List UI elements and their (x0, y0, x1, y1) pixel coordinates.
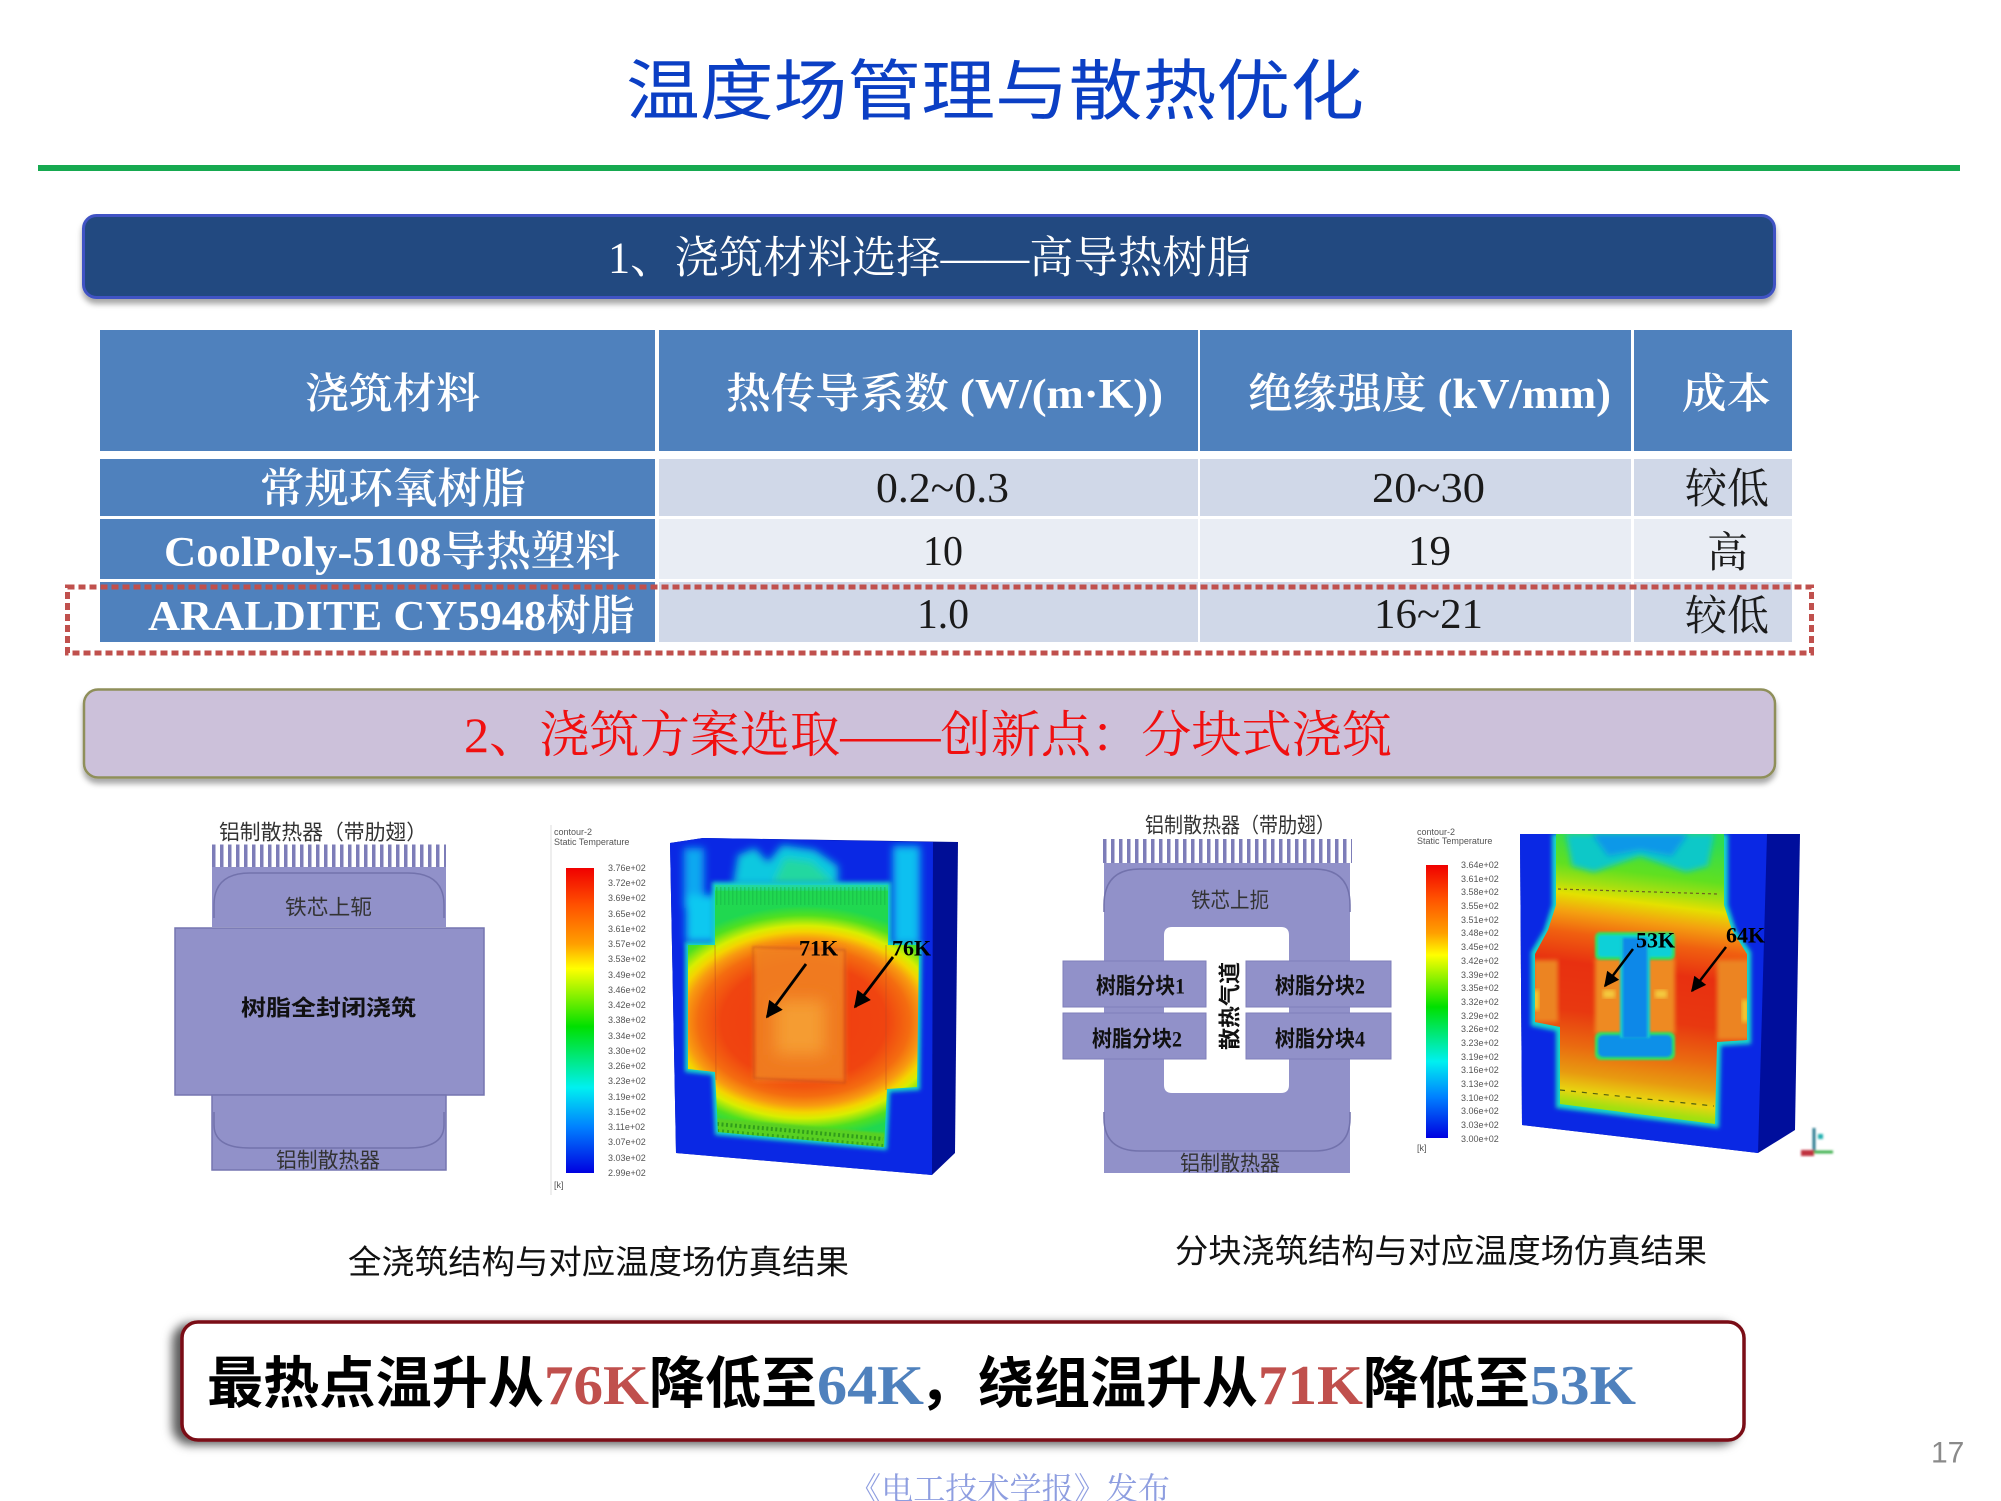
heat map: segmented potting (1520, 834, 1833, 1156)
diagram: segmented potting structure: 树脂分块4 (1275, 1026, 1365, 1052)
legend: left colour bar: 3.34e+02 (608, 1031, 646, 1041)
label: 53K: 53K (1636, 928, 1675, 952)
table header row (100, 330, 1792, 451)
arrow: 71K (767, 964, 806, 1017)
banner: section 2 (84, 690, 1775, 778)
legend: right colour bar: 3.61e+02 (1461, 874, 1499, 884)
page number: 17 (1931, 1436, 1964, 1470)
legend: left colour bar: Static Temperature (554, 837, 629, 847)
table row: epoxy: 0.2~0.3 (876, 466, 1009, 512)
heat map: full potting (670, 838, 958, 1175)
legend: right colour bar: 3.45e+02 (1461, 942, 1499, 952)
diagram: segmented potting structure: 铝制散热器（带肋翅） (1145, 814, 1335, 838)
legend: right colour bar: 3.13e+02 (1461, 1079, 1499, 1089)
table row: Araldite: ARALDITE CY5948树脂 (148, 593, 635, 640)
diagram: full potting structure: 铝制散热器（带肋翅） (219, 822, 427, 844)
diagram: segmented potting structure: 铝制散热器 (1180, 1152, 1280, 1176)
legend: left colour bar: 3.53e+02 (608, 954, 646, 964)
legend: left colour bar: contour-2 (554, 827, 592, 837)
legend: left colour bar: 3.26e+02 (608, 1061, 646, 1071)
highlight: dashed box (68, 587, 1812, 653)
diagram: segmented potting structure: 树脂分块1 (1096, 974, 1185, 998)
diagram: segmented potting structure (1063, 814, 1391, 1176)
legend: left colour bar: 3.23e+02 (608, 1076, 646, 1086)
diagram: segmented potting structure: 树脂分块2 (1092, 1026, 1182, 1052)
table header row: 成本 (1682, 372, 1771, 418)
legend: right colour bar: 3.19e+02 (1461, 1052, 1499, 1062)
legend: right colour bar: 3.26e+02 (1461, 1024, 1499, 1034)
legend: left colour bar: 3.15e+02 (608, 1107, 646, 1117)
legend: left colour bar: 3.49e+02 (608, 970, 646, 980)
legend: right colour bar: 3.58e+02 (1461, 887, 1499, 897)
table header row: 浇筑材料 (305, 371, 480, 418)
legend: right colour bar: 3.16e+02 (1461, 1065, 1499, 1075)
legend: right colour bar: 3.06e+02 (1461, 1106, 1499, 1116)
title underline (38, 165, 1960, 171)
caption: full potting: 全浇筑结构与对应温度场仿真结果 (348, 1244, 849, 1280)
legend: right colour bar: contour-2 (1417, 827, 1455, 837)
legend: left colour bar: 3.46e+02 (608, 985, 646, 995)
legend: right colour bar: 3.23e+02 (1461, 1038, 1499, 1048)
legend: left colour bar: 2.99e+02 (608, 1168, 646, 1178)
legend: right colour bar: 3.10e+02 (1461, 1093, 1499, 1103)
legend: right colour bar (1417, 827, 1499, 1153)
arrow: 64K (1692, 947, 1726, 991)
table row: Araldite: 16~21 (1374, 592, 1483, 638)
legend: left colour bar (551, 825, 646, 1195)
legend: right colour bar: Static Temperature (1417, 836, 1492, 846)
conclusion box: 绕组温升从 (978, 1354, 1258, 1416)
conclusion box: 降低至 (1363, 1354, 1530, 1416)
legend: right colour bar: 3.48e+02 (1461, 928, 1499, 938)
legend: left colour bar: 3.38e+02 (608, 1015, 646, 1025)
legend: right colour bar: 3.51e+02 (1461, 915, 1499, 925)
legend: left colour bar: 3.72e+02 (608, 878, 646, 888)
legend: right colour bar: 3.35e+02 (1461, 983, 1499, 993)
table: casting materials (100, 330, 1792, 642)
table header row: 绝缘强度 (kV/mm) (1248, 371, 1611, 418)
legend: left colour bar: 3.65e+02 (608, 909, 646, 919)
banner: section 1 (84, 216, 1774, 298)
diagram: full potting structure (175, 822, 484, 1172)
legend: left colour bar: 3.11e+02 (608, 1122, 645, 1132)
legend: right colour bar: 3.32e+02 (1461, 997, 1499, 1007)
banner: section 1: 1、浇筑材料选择——高导热树脂 (608, 234, 1251, 282)
conclusion box: 76K (544, 1355, 649, 1417)
legend: left colour bar: 3.76e+02 (608, 863, 646, 873)
conclusion box: 最热点温升从 (207, 1354, 544, 1416)
table row: CoolPoly: CoolPoly-5108导热塑料 (164, 529, 620, 576)
label: 64K: 64K (1726, 922, 1765, 948)
arrow: 53K (1605, 949, 1633, 986)
legend: right colour bar: 3.00e+02 (1461, 1134, 1499, 1144)
table header row: 热传导系数 (W/(m·K)) (726, 371, 1163, 418)
table row: CoolPoly: 19 (1408, 529, 1451, 575)
label: 76K: 76K (892, 936, 931, 960)
legend: right colour bar: 3.64e+02 (1461, 860, 1499, 870)
conclusion box: 64K (817, 1355, 924, 1417)
legend: left colour bar: 3.61e+02 (608, 924, 646, 934)
legend: right colour bar: 3.42e+02 (1461, 956, 1499, 966)
diagram: segmented potting structure: 树脂分块2 (1275, 974, 1365, 998)
table row: Araldite: 较低 (1685, 594, 1769, 640)
legend: right colour bar: 3.55e+02 (1461, 901, 1499, 911)
diagram: full potting structure: 铁芯上轭 (285, 896, 372, 920)
table row: Araldite (100, 582, 1792, 642)
legend: left colour bar: 3.07e+02 (608, 1137, 646, 1147)
title: 温度场管理与散热优化 (626, 54, 1364, 128)
legend: left colour bar: 3.42e+02 (608, 1000, 646, 1010)
legend: right colour bar: 3.03e+02 (1461, 1120, 1499, 1130)
conclusion box: ， (919, 1354, 975, 1416)
diagram: segmented potting structure: 铁芯上扼 (1191, 890, 1269, 912)
legend: left colour bar: 3.19e+02 (608, 1092, 646, 1102)
legend: right colour bar: [k] (1417, 1143, 1427, 1153)
legend: left colour bar: 3.30e+02 (608, 1046, 646, 1056)
legend: left colour bar: 3.69e+02 (608, 893, 646, 903)
table row: epoxy: 较低 (1685, 467, 1769, 513)
legend: left colour bar: 3.03e+02 (608, 1153, 646, 1163)
diagram: full potting structure: 铝制散热器 (276, 1150, 380, 1172)
table row: epoxy (100, 459, 1792, 516)
table row: epoxy: 20~30 (1372, 466, 1485, 512)
diagram: segmented potting structure: 散热气道 (1218, 962, 1242, 1050)
conclusion box (182, 1322, 1744, 1440)
legend: left colour bar: 3.57e+02 (608, 939, 646, 949)
banner: section 2: 2、浇筑方案选取——创新点：分块式浇筑 (464, 707, 1392, 763)
conclusion box: 降低至 (649, 1354, 817, 1416)
table row: Araldite: 1.0 (917, 592, 969, 638)
legend: left colour bar: [k] (554, 1180, 564, 1190)
legend: right colour bar: 3.29e+02 (1461, 1011, 1499, 1021)
conclusion box: 53K (1530, 1355, 1636, 1417)
table row: CoolPoly (100, 519, 1792, 579)
arrow: 76K (855, 957, 893, 1007)
legend: right colour bar: 3.39e+02 (1461, 970, 1499, 980)
table row: epoxy: 常规环氧树脂 (260, 466, 526, 513)
label: 71K: 71K (799, 936, 838, 960)
diagram: full potting structure: 树脂全封闭浇筑 (241, 996, 416, 1020)
icon: axis triad (1801, 1128, 1833, 1156)
caption: segmented potting: 分块浇筑结构与对应温度场仿真结果 (1175, 1232, 1707, 1270)
table row: CoolPoly: 高 (1707, 530, 1748, 577)
conclusion box: 71K (1258, 1355, 1363, 1417)
table row: CoolPoly: 10 (923, 529, 963, 575)
